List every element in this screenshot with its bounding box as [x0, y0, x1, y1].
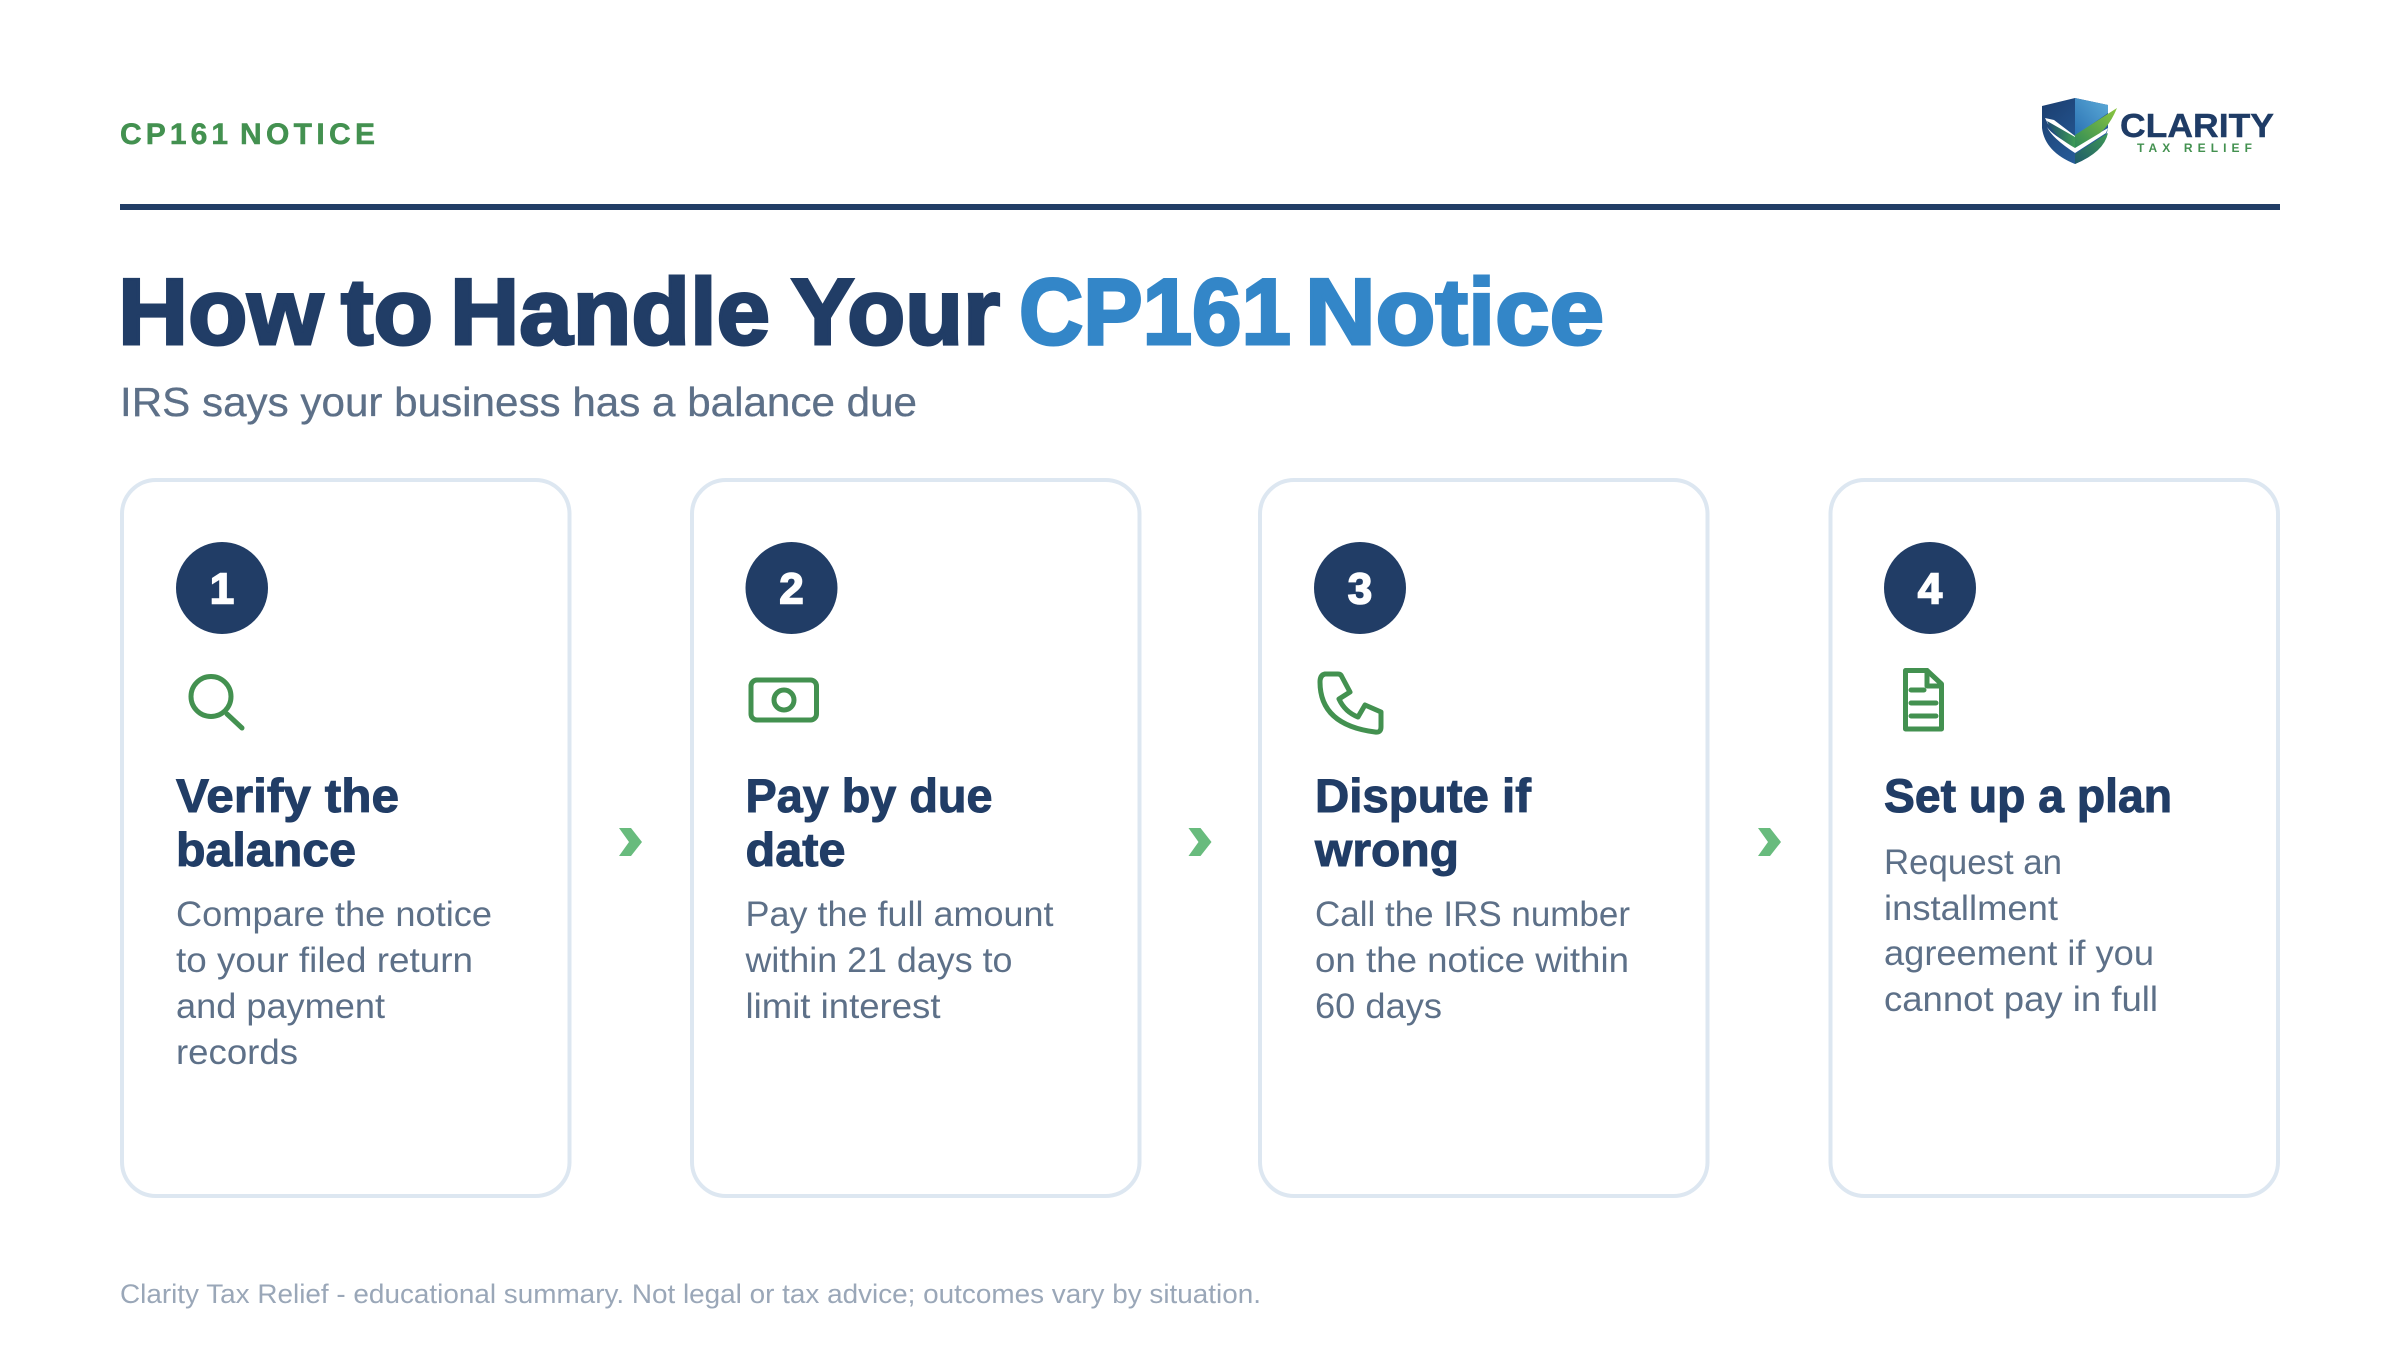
step 2 body: limit interest	[746, 987, 941, 1026]
step 4 body	[1884, 843, 2158, 1019]
step 4 body: Request an	[1884, 843, 2062, 882]
step 1 heading: Verify the	[176, 769, 399, 822]
step 1 heading: balance	[176, 823, 356, 876]
step 1 body	[176, 895, 492, 1072]
step 1 body: Compare the notice	[176, 895, 492, 934]
eyebrow label: NOTICE	[240, 118, 375, 151]
panel: step 4	[1830, 480, 2278, 1196]
step number 4	[1884, 542, 1976, 634]
title: How	[118, 259, 324, 364]
step 3 body	[1315, 895, 1630, 1026]
title: Your	[791, 259, 1000, 364]
step 3 heading: wrong	[1314, 823, 1459, 876]
arrow 1	[619, 828, 642, 856]
step 3 heading	[1314, 769, 1531, 876]
header rule	[120, 204, 2280, 210]
logo wordmark: CLARITY	[2120, 107, 2274, 144]
arrow 3	[1758, 828, 1781, 856]
title: Handle	[450, 259, 770, 364]
panel: step 2	[692, 480, 1140, 1196]
step 1 body: to your filed return	[176, 941, 473, 980]
step 2 heading: Pay by due	[746, 769, 992, 822]
title: Notice	[1305, 259, 1604, 364]
step number 3: 3	[1348, 564, 1372, 614]
step number 1	[176, 542, 268, 634]
step 2 body: within 21 days to	[744, 941, 1012, 980]
step 1 body: and payment	[176, 987, 385, 1026]
logo: Clarity Tax Relief	[2042, 98, 2274, 164]
panel: step 1	[122, 480, 570, 1196]
step 3 body: Call the IRS number	[1315, 895, 1630, 934]
step 2 heading	[746, 769, 992, 876]
step number 1: 1	[210, 564, 234, 614]
step 2 body: Pay the full amount	[746, 895, 1054, 934]
title: CP161	[1019, 259, 1291, 364]
panel: step 3	[1260, 480, 1708, 1196]
step 1 body: records	[176, 1033, 298, 1072]
icon: banknote	[751, 680, 816, 720]
arrow 2	[1188, 828, 1212, 856]
step 4 body: cannot pay in full	[1884, 980, 2158, 1019]
step number 2: 2	[779, 564, 804, 614]
title: to	[341, 259, 433, 364]
eyebrow label	[120, 118, 375, 151]
step number 4: 4	[1918, 564, 1943, 614]
icon: magnifying glass	[191, 676, 242, 728]
title	[118, 259, 1604, 364]
logo tagline: TAX RELIEF	[2137, 141, 2252, 155]
icon: shield	[2042, 98, 2117, 164]
step number 3	[1314, 542, 1406, 634]
step 2 body	[744, 895, 1054, 1026]
step 3 heading: Dispute if	[1315, 769, 1531, 822]
icon: document	[1906, 670, 1942, 729]
step 3 body: 60 days	[1315, 987, 1442, 1026]
eyebrow label: CP161	[120, 118, 228, 151]
step 1 heading	[176, 769, 399, 876]
icon: phone	[1320, 674, 1381, 732]
footer disclaimer: Clarity Tax Relief - educational summary. Not legal or tax advice; outcomes vary by situation.	[120, 1279, 1261, 1309]
subtitle: IRS says your business has a balance due	[120, 379, 917, 425]
step number 2	[746, 542, 838, 634]
step 4 body: installment	[1884, 889, 2058, 928]
step 3 body: on the notice within	[1315, 941, 1629, 980]
step 4 heading: Set up a plan	[1884, 769, 2172, 822]
step 4 body: agreement if you	[1884, 934, 2154, 973]
step 2 heading: date	[746, 823, 846, 876]
